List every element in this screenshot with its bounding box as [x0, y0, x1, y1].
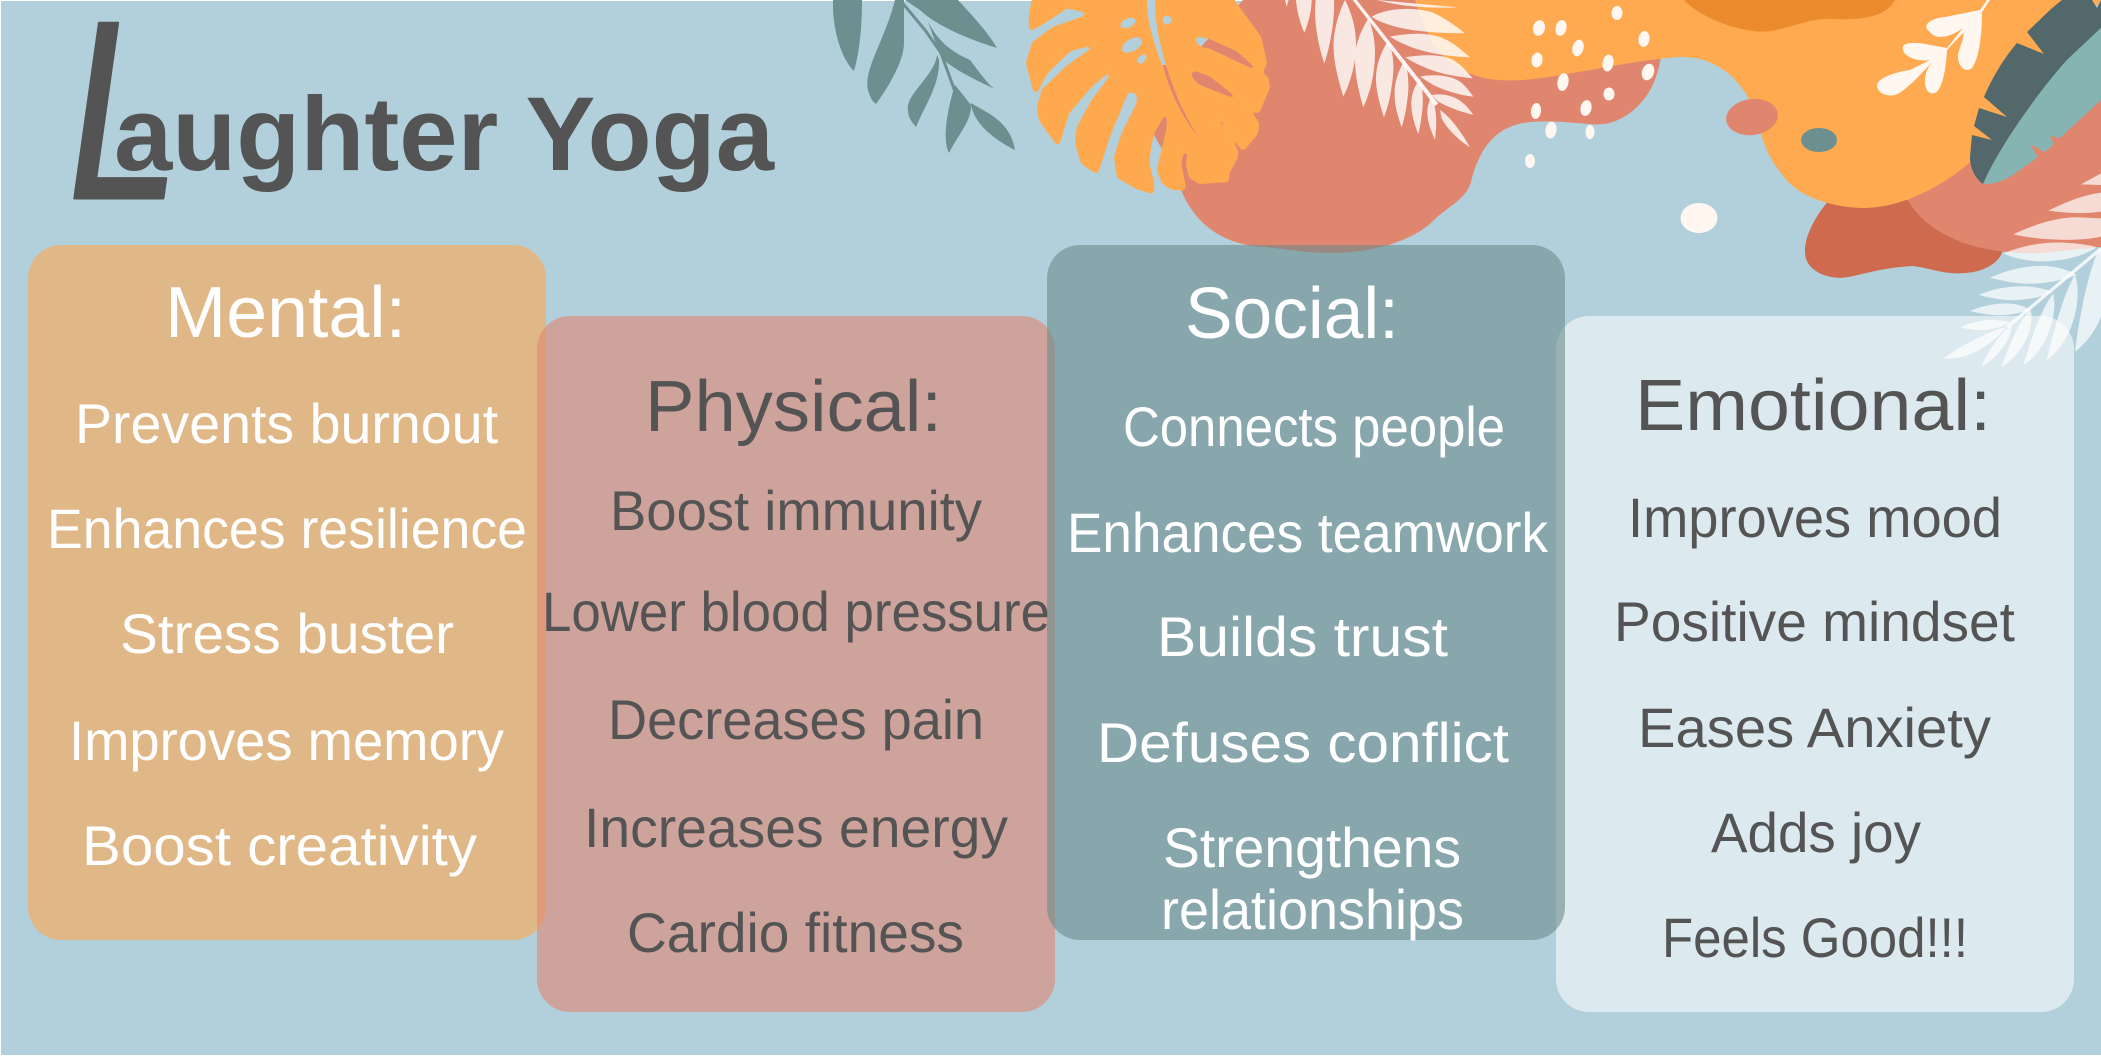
fern: white lower right [1943, 173, 2101, 367]
branch: small white leaves [1877, 0, 1990, 95]
list item: Prevents burnout [75, 392, 498, 455]
fern: pink top [1285, 0, 1473, 147]
title: aughter Yoga [114, 76, 776, 193]
list item: Enhances resilience [47, 497, 527, 560]
blob: dark orange [1684, 0, 1895, 32]
card background [537, 316, 1055, 1012]
list item: Strengthens [1163, 816, 1461, 879]
list item: relationships [1161, 878, 1464, 941]
list item: Decreases pain [608, 688, 984, 751]
list item: Builds trust [1157, 605, 1448, 668]
list item: Feels Good!!! [1662, 906, 1968, 969]
specks: white dots [1525, 6, 1656, 168]
list item: Boost creativity [82, 814, 477, 877]
blob: right salmon [1905, 60, 2101, 253]
title [50, 0, 776, 253]
list item: Improves memory [69, 709, 504, 772]
list item: Defuses conflict [1097, 711, 1509, 774]
panel: emotional [1556, 316, 2074, 1012]
list item: Eases Anxiety [1638, 696, 1991, 759]
spot: teal [1801, 128, 1837, 152]
fern: teal top [833, 0, 1015, 153]
decorative blobs and foliage [833, 0, 2101, 367]
card background [1047, 245, 1565, 940]
list item: Connects people [1123, 395, 1505, 458]
spot: cream [1680, 203, 1718, 233]
list item: Improves mood [1628, 486, 2002, 549]
spot: salmon [1724, 96, 1780, 138]
list item: Cardio fitness [627, 901, 964, 964]
blob: orange [1415, 0, 2101, 208]
list item: Boost immunity [610, 479, 982, 542]
heading: Mental: [165, 273, 406, 353]
panel: physical [537, 316, 1055, 1012]
panel: social [1047, 245, 1565, 941]
list item: Enhances teamwork [1067, 501, 1549, 564]
list item: Increases energy [584, 796, 1008, 859]
card background [1556, 316, 2074, 1012]
list item: Stress buster [120, 602, 454, 665]
blob: large salmon [1153, 0, 1664, 253]
leaf: banana dark and teal [1970, 0, 2101, 184]
heading: Emotional: [1635, 366, 1991, 446]
card background [28, 245, 546, 940]
panel: mental [28, 245, 546, 940]
leaf: orange monstera [1027, 0, 1269, 193]
list item: Lower blood pressure [542, 580, 1050, 643]
blob: dark salmon [1805, 200, 2003, 278]
list item: Adds joy [1711, 801, 1921, 864]
list item: Positive mindset [1614, 590, 2015, 653]
heading: Physical: [645, 367, 942, 447]
heading: Social: [1185, 274, 1399, 354]
